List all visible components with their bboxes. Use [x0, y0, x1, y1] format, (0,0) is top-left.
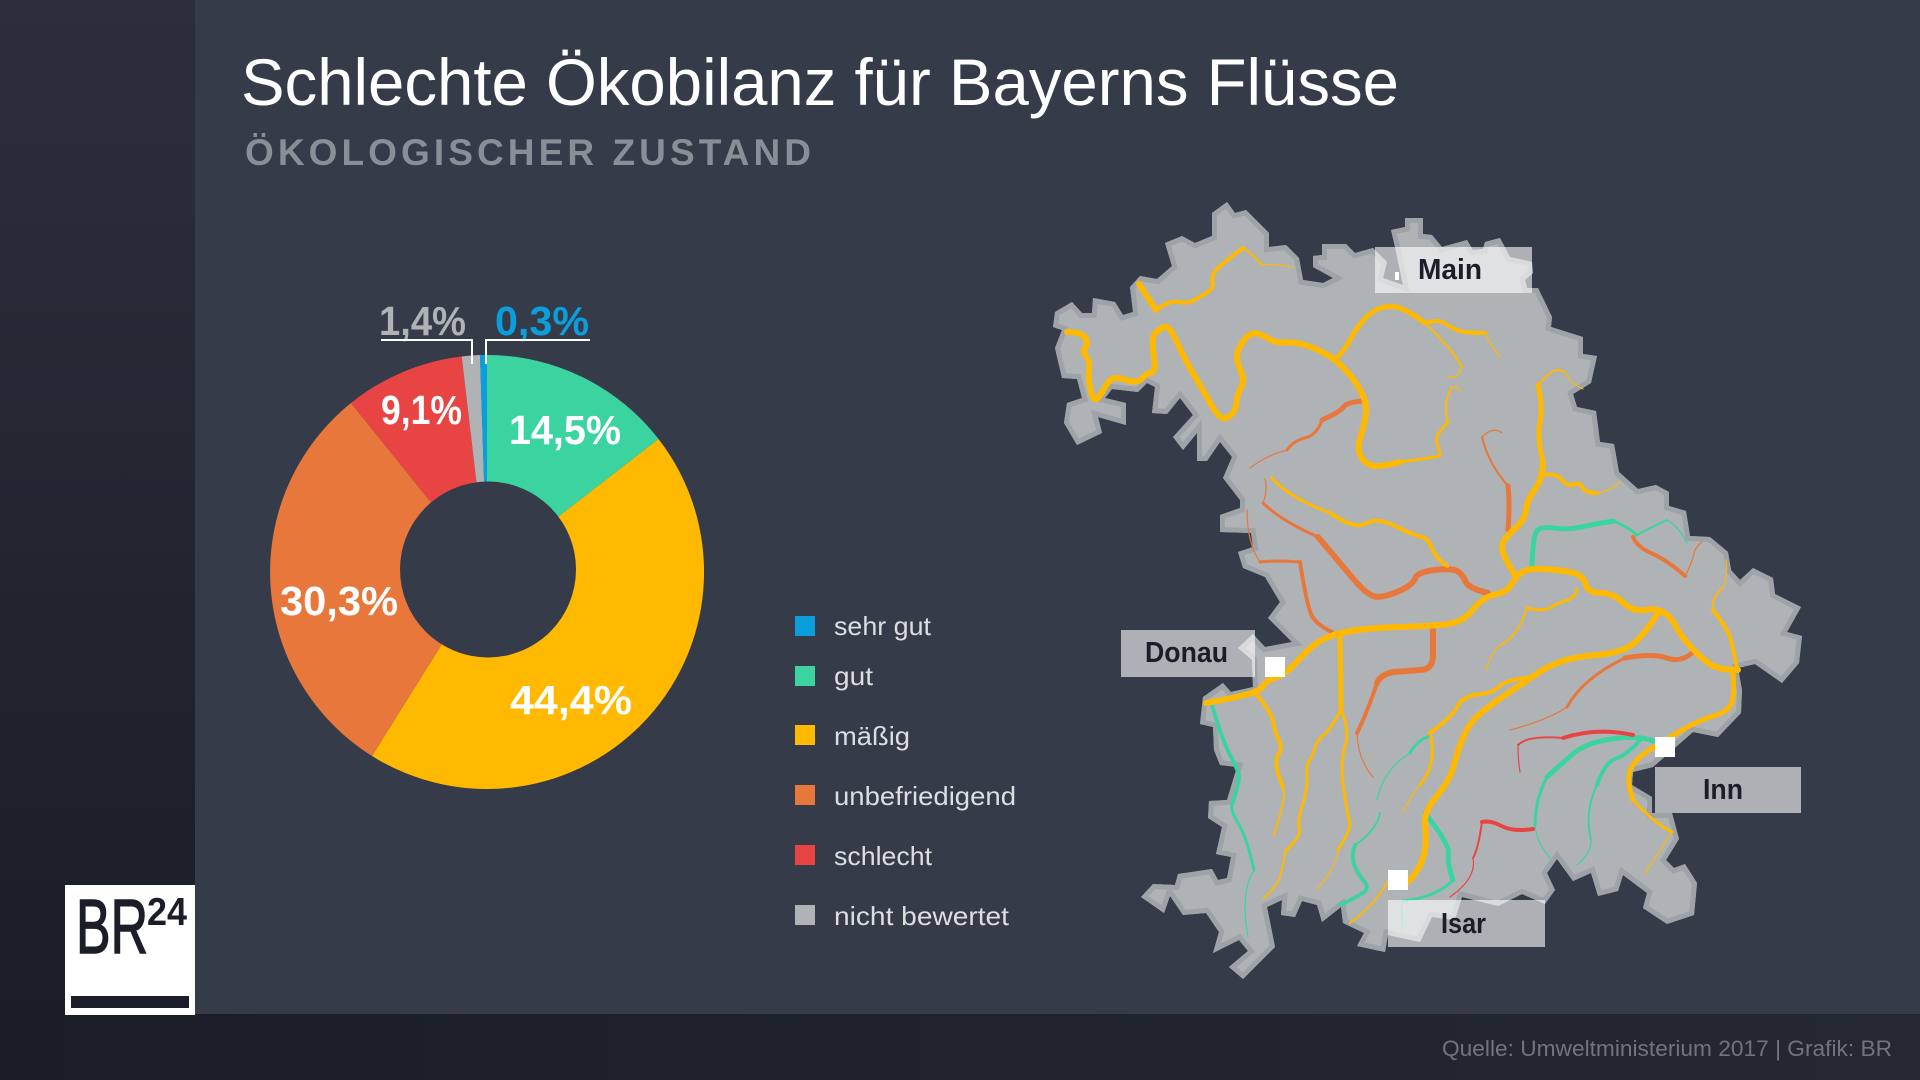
- footer band: [0, 1014, 1920, 1080]
- legend item: unbefriedigend: unbefriedigend: [834, 781, 1016, 811]
- left band: [0, 0, 195, 1080]
- legend item: sehr gut: [795, 611, 932, 641]
- segment: mäßig 44,4%: [372, 439, 704, 789]
- callout 0,3%: 0,3%: [495, 298, 589, 344]
- logo BR24: [65, 884, 195, 1015]
- callout 1,4%: 1,4%: [379, 298, 466, 344]
- marker: Donau: [1265, 657, 1285, 677]
- legend item: schlecht: schlecht: [834, 841, 933, 871]
- label: Main: Main: [1418, 254, 1482, 286]
- value 30,3%: 30,3%: [280, 578, 398, 624]
- map fill: [1040, 195, 1810, 985]
- rivers: red: [1450, 732, 1633, 897]
- value 14,5%: 14,5%: [509, 407, 621, 453]
- source line: Quelle: Umweltministerium 2017 | Grafik: BR: [1442, 1036, 1892, 1061]
- legend item: gut: gut: [834, 661, 874, 691]
- value 9,1%: 9,1%: [381, 387, 462, 433]
- legend item: sehr gut: sehr gut: [834, 611, 932, 641]
- map of Bavaria: [1040, 195, 1810, 985]
- rivers: yellow: [1067, 248, 1738, 923]
- label: Isar: [1388, 900, 1545, 947]
- segment: sehr gut 0,3%: [480, 355, 487, 572]
- logo BR24: 24: [147, 891, 187, 934]
- logo BR24: BR: [76, 884, 148, 970]
- segment: schlecht 9,1%: [351, 356, 487, 572]
- segment: unbefriedigend 30,3%: [270, 403, 487, 756]
- legend item: nicht bewertet: nicht bewertet: [834, 901, 1010, 931]
- segment: gut 14,5%: [487, 355, 658, 572]
- callout 0,3%: [486, 298, 590, 364]
- label: Inn: Inn: [1703, 774, 1743, 806]
- label: Donau: [1121, 630, 1255, 677]
- value 44,4%: 44,4%: [510, 677, 632, 723]
- legend: [795, 611, 1016, 931]
- subtitle: ÖKOLOGISCHER ZUSTAND: [245, 132, 811, 173]
- marker: Inn: [1655, 737, 1675, 757]
- label: Inn: [1655, 767, 1801, 813]
- callout 1,4%: [379, 298, 472, 364]
- rivers: green: [1212, 520, 1687, 937]
- label: Donau: Donau: [1145, 637, 1228, 669]
- map border: [1053, 202, 1802, 979]
- label: Main: [1375, 247, 1532, 293]
- title: Schlechte Ökobilanz für Bayerns Flüsse: [241, 45, 1399, 119]
- legend item: mäßig: [795, 721, 910, 751]
- legend item: schlecht: [795, 841, 933, 871]
- segment: nicht bewertet 1,4%: [462, 355, 487, 572]
- donut chart: [270, 355, 704, 789]
- marker: Isar: [1388, 870, 1408, 890]
- rivers: orange: [1247, 401, 1702, 777]
- legend item: gut: [795, 661, 874, 691]
- donut hole: [400, 482, 576, 658]
- marker: Main: [1395, 272, 1399, 280]
- label: Isar: Isar: [1441, 908, 1486, 940]
- legend item: mäßig: mäßig: [834, 721, 910, 751]
